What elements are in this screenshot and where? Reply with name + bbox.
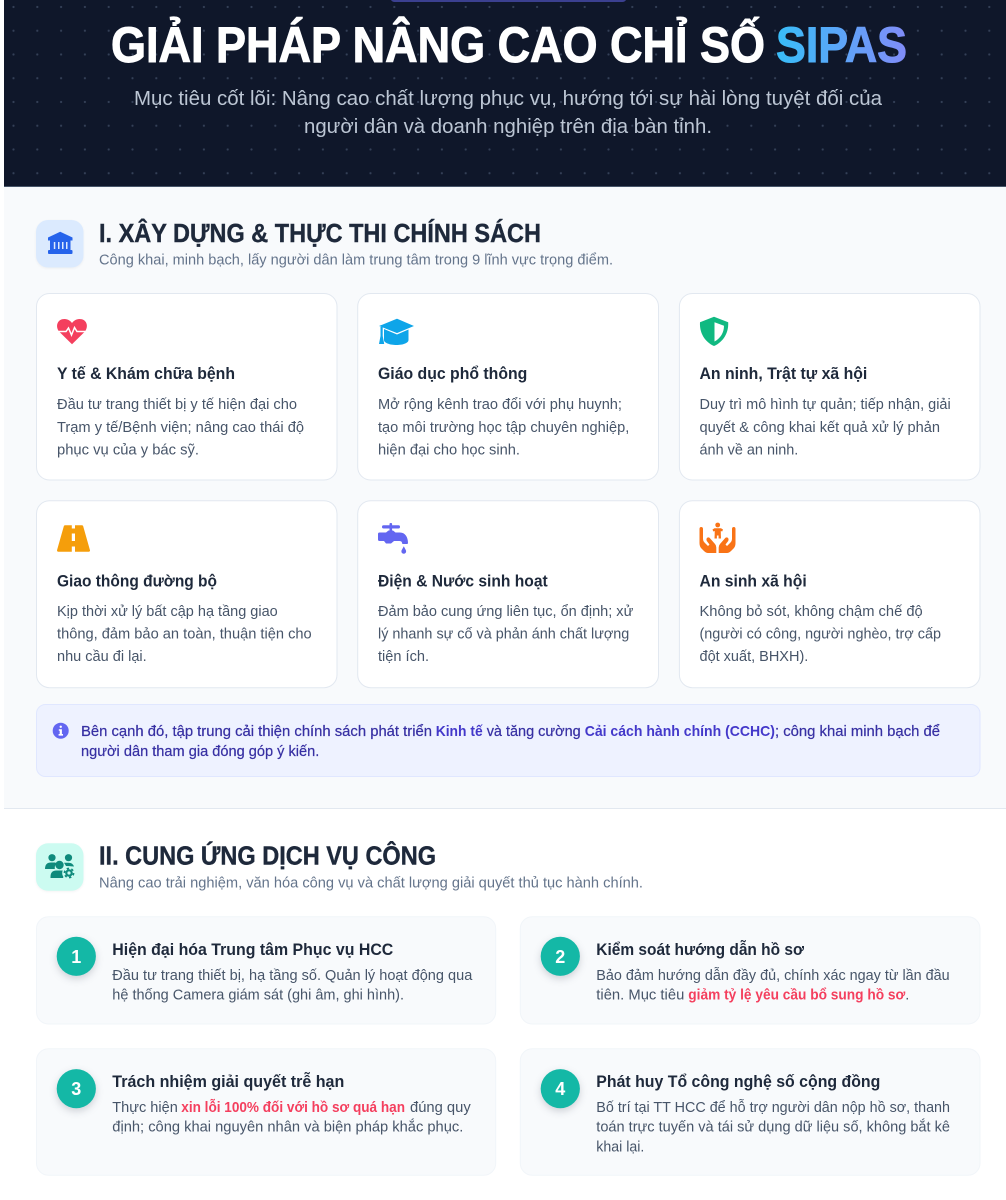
card text xyxy=(378,397,629,458)
service text: xin lỗi 100% đối với hồ sơ quá hạn xyxy=(181,1099,405,1116)
card: utilities xyxy=(358,501,658,688)
number badge 4 xyxy=(541,1069,580,1108)
card title: Giáo dục phổ thông xyxy=(378,364,527,383)
card text: thông, đảm bảo an toàn, thuận tiện cho xyxy=(57,627,312,643)
card title: Điện & Nước sinh hoạt xyxy=(378,572,548,590)
service text xyxy=(596,1099,950,1155)
card text: nhu cầu đi lại. xyxy=(57,649,147,665)
icon: road xyxy=(58,524,89,554)
card: education xyxy=(358,294,658,480)
service title: Phát huy Tổ công nghệ số cộng đồng xyxy=(596,1072,880,1091)
service text: Đầu tư trang thiết bị, hạ tầng số. Quản lý hoạt động qua xyxy=(112,968,473,984)
icon: caring hands xyxy=(700,523,736,553)
card text: ánh về an ninh. xyxy=(700,442,798,458)
card title: Y tế & Khám chữa bệnh xyxy=(57,364,235,383)
service text: Bảo đảm hướng dẫn đầy đủ, chính xác ngay từ lần đầu xyxy=(596,967,950,984)
icon: graduation cap xyxy=(378,318,415,345)
callout: additional focus xyxy=(36,704,980,776)
service title: Trách nhiệm giải quyết trễ hạn xyxy=(112,1072,344,1091)
card text: quyết & công khai kết quả xử lý phản xyxy=(700,420,940,436)
callout text: Cải cách hành chính (CCHC) xyxy=(585,724,775,740)
callout text: Bên cạnh đó, tập trung cải thiện chính sách phát triển xyxy=(81,724,432,740)
number badge 1: 1 xyxy=(71,947,81,967)
service text: toán trực tuyến và tái sử dụng dữ liệu số, không bắt kê xyxy=(596,1119,950,1136)
service text: khai lại. xyxy=(596,1139,644,1155)
service card 3 xyxy=(36,1049,496,1175)
section II subheading: Nâng cao trải nghiệm, văn hóa công vụ và chất lượng giải quyết thủ tục hành chính. xyxy=(99,876,643,892)
icon: heart pulse xyxy=(55,319,89,344)
card title: An sinh xã hội xyxy=(700,572,807,590)
icon: shield xyxy=(700,317,728,346)
card text xyxy=(57,397,304,458)
card text: Trạm y tế/Bệnh viện; nâng cao thái độ xyxy=(57,420,304,436)
service text: Bố trí tại TT HCC để hỗ trợ người dân nộp hồ sơ, thanh xyxy=(596,1099,950,1116)
service title: Kiểm soát hướng dẫn hồ sơ xyxy=(596,940,804,959)
card text: Mở rộng kênh trao đổi với phụ huynh; xyxy=(378,397,622,413)
card text: Đầu tư trang thiết bị y tế hiện đại cho xyxy=(57,397,297,413)
section II: public services xyxy=(4,809,1006,1200)
card: security xyxy=(679,294,980,480)
number badge 4: 4 xyxy=(555,1079,565,1099)
service text: giảm tỷ lệ yêu cầu bổ sung hồ sơ xyxy=(688,988,906,1004)
service card 2 xyxy=(520,917,980,1024)
card: healthcare xyxy=(36,294,337,480)
card text xyxy=(378,604,634,665)
card text: Đảm bảo cung ứng liên tục, ổn định; xử xyxy=(378,604,634,620)
section I icon: landmark xyxy=(36,220,84,268)
number badge 2: 2 xyxy=(555,947,565,967)
subtitle xyxy=(134,87,883,138)
card text xyxy=(700,604,941,665)
callout text: Kinh tế xyxy=(436,724,484,740)
card text: hiện đại cho học sinh. xyxy=(378,442,520,458)
callout text: và tăng cường xyxy=(487,724,581,740)
card text: Không bỏ sót, không chậm chế độ xyxy=(700,604,923,620)
card text: phục vụ của y bác sỹ. xyxy=(57,442,199,458)
callout text: người dân tham gia đóng góp ý kiến. xyxy=(81,744,319,760)
number badge 3 xyxy=(57,1069,96,1108)
card text xyxy=(700,397,951,458)
service text: đúng quy xyxy=(410,1100,471,1116)
subtitle: người dân và doanh nghiệp trên địa bàn tỉnh. xyxy=(304,115,712,138)
service card 4 xyxy=(520,1049,980,1175)
service text: tiên. Mục tiêu xyxy=(596,988,684,1004)
service card 1 xyxy=(36,917,496,1024)
card text: (người có công, người nghèo, trợ cấp xyxy=(700,627,941,643)
card text: Kịp thời xử lý bất cập hạ tầng giao xyxy=(57,604,278,620)
icon: info xyxy=(53,723,69,739)
top badge xyxy=(390,0,626,2)
number badge 2 xyxy=(541,937,580,976)
number badge 3: 3 xyxy=(71,1079,81,1099)
number badge 1 xyxy=(57,937,96,976)
section II heading: II. CUNG ỨNG DỊCH VỤ CÔNG xyxy=(99,840,436,870)
subtitle: Mục tiêu cốt lõi: Nâng cao chất lượng phục vụ, hướng tới sự hài lòng tuyệt đối của xyxy=(134,87,883,110)
service text xyxy=(596,967,950,1004)
service text xyxy=(112,968,473,1004)
card text: Duy trì mô hình tự quản; tiếp nhận, giải xyxy=(700,397,951,413)
card title: Giao thông đường bộ xyxy=(57,572,217,590)
service text xyxy=(112,1099,471,1136)
service text: hệ thống Camera giám sát (ghi âm, ghi hình). xyxy=(112,988,404,1004)
section I heading: I. XÂY DỰNG & THỰC THI CHÍNH SÁCH xyxy=(99,218,541,248)
card title: An ninh, Trật tự xã hội xyxy=(700,364,867,383)
card text: tiện ích. xyxy=(378,649,429,665)
card: transport xyxy=(36,501,337,688)
card text: đột xuất, BHXH). xyxy=(700,649,808,665)
section I subheading: Công khai, minh bạch, lấy người dân làm trung tâm trong 9 lĩnh vực trọng điểm. xyxy=(99,252,613,268)
section I: policy xyxy=(4,187,1006,809)
card: social welfare xyxy=(679,501,980,688)
title: SIPAS xyxy=(776,17,907,73)
card text: tạo môi trường học tập chuyên nghiệp, xyxy=(378,420,629,436)
header banner xyxy=(4,0,1006,187)
card text: lý nhanh sự cố và phản ánh chất lượng xyxy=(378,627,629,643)
title: GIẢI PHÁP NÂNG CAO CHỈ SỐ xyxy=(111,16,765,73)
callout text: ; công khai minh bạch để xyxy=(775,724,940,740)
card text xyxy=(57,604,312,665)
service text: Thực hiện xyxy=(112,1100,178,1116)
section II icon: users gear xyxy=(36,843,84,891)
service title: Hiện đại hóa Trung tâm Phục vụ HCC xyxy=(112,940,393,959)
callout text xyxy=(81,724,940,760)
service text: định; công khai nguyên nhân và biện pháp khắc phục. xyxy=(112,1119,463,1136)
icon: faucet xyxy=(378,523,408,554)
service text: . xyxy=(905,988,909,1004)
